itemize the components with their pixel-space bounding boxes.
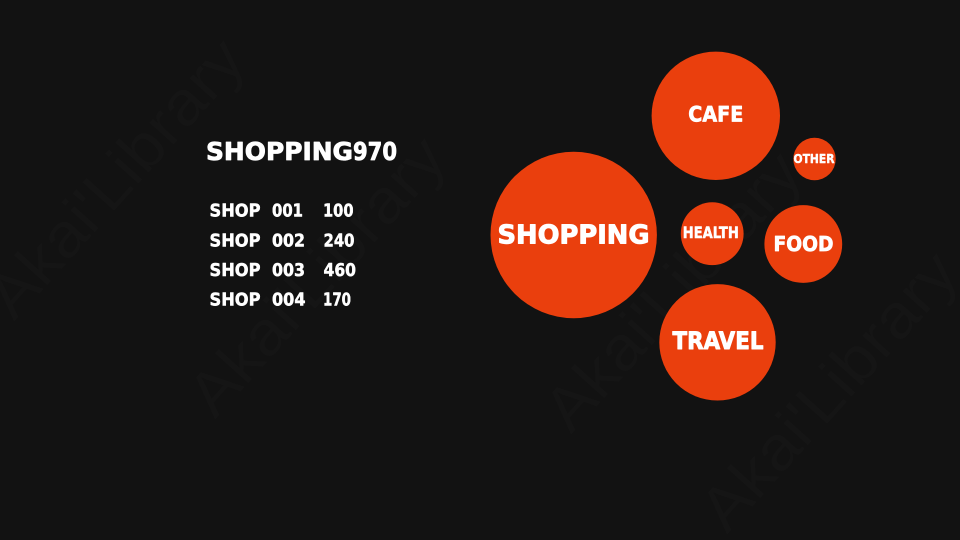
row: shop 003: 003 bbox=[272, 261, 305, 281]
bubble: cafe bbox=[652, 52, 780, 180]
row: shop 003 bbox=[210, 261, 356, 281]
bubble: health bbox=[681, 202, 744, 265]
watermark text: Akai'Library bbox=[686, 238, 960, 540]
bubble: shopping: SHOPPING bbox=[498, 220, 650, 250]
bubble chart bbox=[490, 52, 842, 400]
row: shop 004: SHOP bbox=[210, 291, 261, 311]
row: shop 002: 002 bbox=[272, 231, 305, 251]
row: shop 002 bbox=[210, 231, 354, 251]
row: shop 001: 001 bbox=[272, 202, 303, 222]
row: shop 001: 100 bbox=[323, 202, 354, 222]
row: shop 001: SHOP bbox=[210, 202, 261, 222]
bubble: food bbox=[764, 205, 842, 283]
bubble: shopping bbox=[490, 152, 657, 318]
row: shop 004: 004 bbox=[272, 291, 306, 311]
bubble: travel bbox=[659, 284, 776, 400]
bubble: cafe: CAFE bbox=[688, 102, 743, 126]
row: shop 002: SHOP bbox=[210, 231, 261, 251]
watermark text: Akai'Library bbox=[174, 123, 460, 429]
bubble: travel: TRAVEL bbox=[672, 327, 764, 355]
bubble: other bbox=[793, 138, 836, 180]
heading: shopping total: 970 bbox=[353, 137, 397, 166]
row: shop 003: 460 bbox=[324, 261, 356, 281]
row: shop 002: 240 bbox=[324, 231, 354, 251]
panel: shopping breakdown bbox=[206, 137, 397, 311]
bubble: health: HEALTH bbox=[683, 224, 739, 242]
bubble: other: OTHER bbox=[794, 151, 835, 166]
row: shop 004 bbox=[210, 291, 351, 311]
row: shop 003: SHOP bbox=[210, 261, 261, 281]
heading: shopping total: SHOPPING bbox=[206, 137, 353, 166]
row: shop 001 bbox=[210, 202, 354, 222]
bubble: food: FOOD bbox=[774, 232, 834, 256]
row: shop 004: 170 bbox=[323, 291, 351, 311]
watermark text: Akai'Library bbox=[530, 138, 816, 444]
